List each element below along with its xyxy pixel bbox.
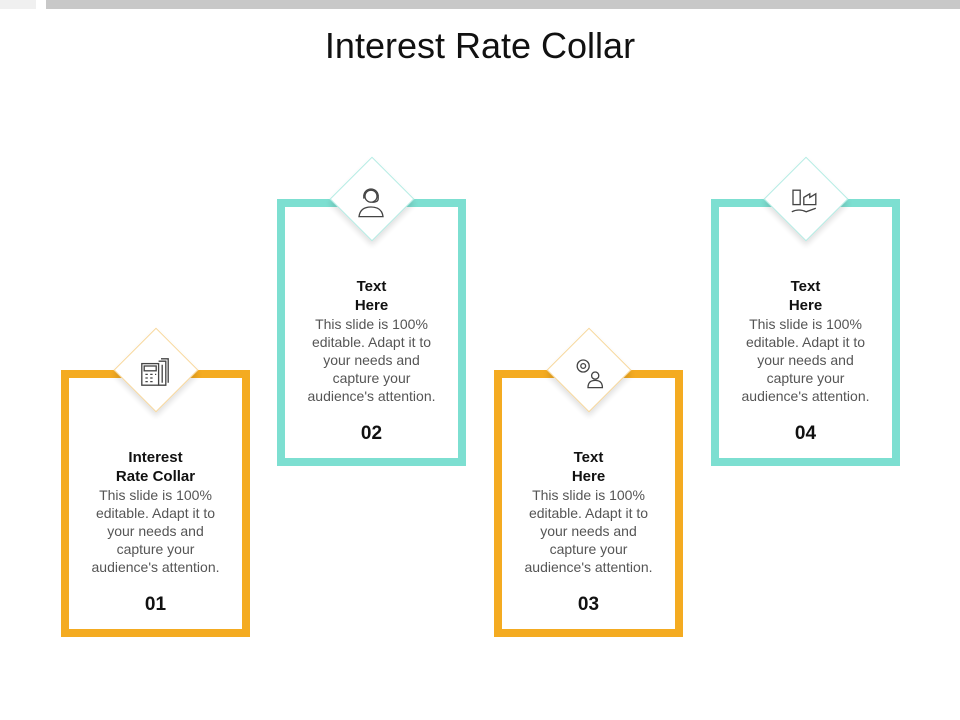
text 04	[742, 278, 870, 404]
card 02	[277, 199, 466, 466]
text 01: Interest	[128, 449, 183, 466]
title: Interest Rate Collar	[325, 25, 635, 66]
text 03: capture your	[550, 541, 627, 557]
text 01: your needs and	[107, 523, 204, 539]
text 02: audience's attention.	[308, 388, 436, 404]
text 01: capture your	[117, 541, 194, 557]
icon diamond 04	[764, 157, 848, 241]
text 02: your needs and	[323, 352, 420, 368]
text 01: audience's attention.	[92, 559, 220, 575]
icon: gear person	[576, 359, 604, 388]
text 02: This slide is 100%	[315, 316, 428, 332]
text 03: This slide is 100%	[532, 487, 645, 503]
number 01: 01	[145, 594, 166, 615]
text 02: capture your	[333, 370, 410, 386]
text 02: Text	[357, 278, 386, 295]
text 04: This slide is 100%	[749, 316, 862, 332]
text 04: audience's attention.	[742, 388, 870, 404]
text 02: Here	[355, 297, 388, 314]
text 02	[308, 278, 436, 404]
text 01: Rate Collar	[116, 468, 195, 485]
text 03: Text	[574, 449, 603, 466]
card 04	[711, 199, 900, 466]
text 01: editable. Adapt it to	[96, 505, 215, 521]
top bar	[0, 0, 960, 9]
icon: calculator documents	[141, 358, 169, 386]
text 04: capture your	[767, 370, 844, 386]
card 01	[61, 370, 250, 637]
text 03: audience's attention.	[524, 559, 652, 575]
icon diamond 02	[330, 157, 414, 241]
text 03: editable. Adapt it to	[529, 505, 648, 521]
number 04: 04	[795, 423, 816, 444]
text 04: your needs and	[757, 352, 854, 368]
text 02: editable. Adapt it to	[312, 334, 431, 350]
number 02: 02	[361, 423, 382, 444]
text 04: Here	[789, 297, 822, 314]
text 01	[92, 449, 220, 575]
icon: headset person	[358, 188, 384, 218]
text 03	[524, 449, 652, 575]
number 03: 03	[578, 594, 599, 615]
icon diamond 01	[114, 328, 198, 412]
text 03: Here	[572, 468, 605, 485]
card 03	[494, 370, 683, 637]
text 01: This slide is 100%	[99, 487, 212, 503]
icon: factory hand	[792, 190, 816, 212]
text 03: your needs and	[540, 523, 637, 539]
icon diamond 03	[547, 328, 631, 412]
text 04: editable. Adapt it to	[746, 334, 865, 350]
text 04: Text	[791, 278, 820, 295]
